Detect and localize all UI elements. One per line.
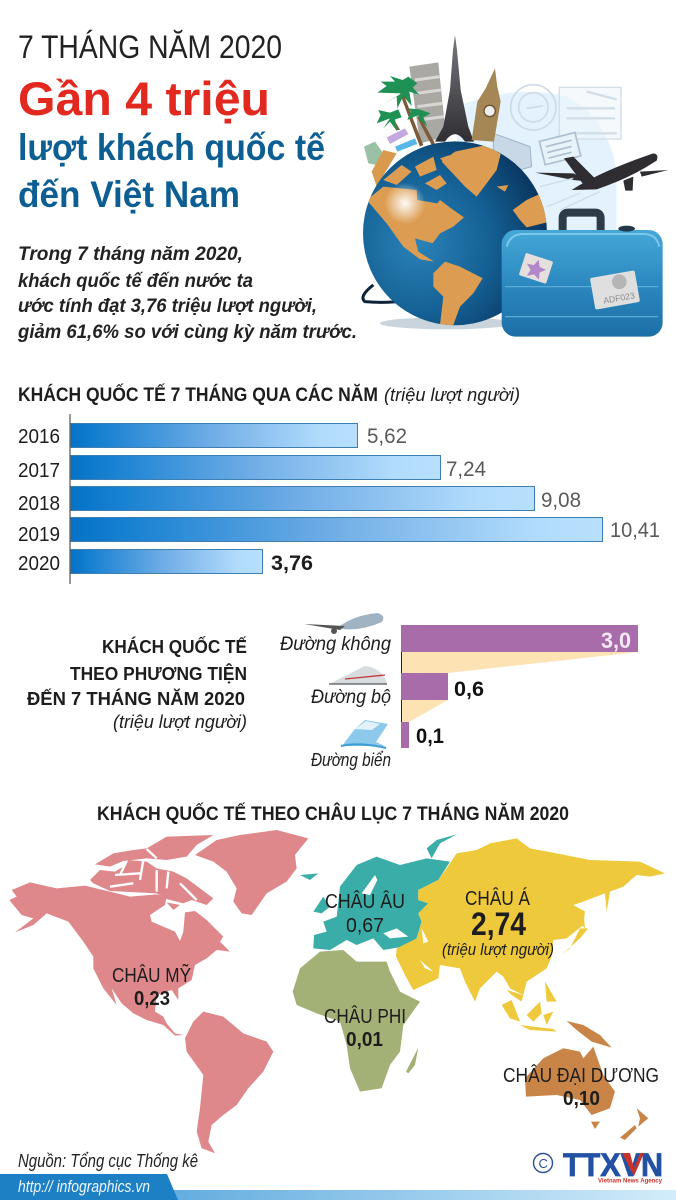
- title: subtitle line 1: lượt khách quốc tế: [18, 127, 325, 168]
- globe glare: [384, 183, 426, 224]
- label: Europe: 0,67: [346, 915, 384, 937]
- section heading: yearly arrivals: KHÁCH QUỐC TẾ 7 THÁNG QUA CÁC NĂM: [18, 384, 378, 406]
- archipelago channels: [110, 849, 197, 900]
- sticker: ADF023 tag: [590, 270, 640, 310]
- suitcase: [502, 213, 663, 337]
- label: Europe: CHÂU ÂU: [325, 890, 405, 913]
- suitcase body: [502, 230, 663, 337]
- sticker: star: [519, 253, 553, 284]
- globe: [363, 141, 550, 325]
- label: sea: Đường biển: [311, 750, 391, 770]
- bar: 2018: 2018: [18, 493, 60, 515]
- label: Oceania: [503, 1064, 659, 1110]
- plane trails: [540, 178, 600, 210]
- footer band: [0, 1174, 676, 1200]
- heading: arrivals by transport: KHÁCH QUỐC TẾ: [102, 636, 247, 657]
- label: Asia: 2,74: [471, 906, 526, 942]
- bar chart: arrivals by year: [18, 414, 660, 584]
- illustration: globe, landmarks, plane and suitcase: [363, 35, 668, 337]
- label: Europe: [325, 890, 405, 937]
- arctic islands: [383, 155, 450, 190]
- bar: 2018: [18, 486, 581, 515]
- intro paragraph: [17, 243, 357, 343]
- cream connectors: [401, 652, 638, 722]
- intro paragraph: Trong 7 tháng năm 2020,: [18, 243, 243, 265]
- bar: road: [401, 673, 484, 701]
- landmark: eiffel tower: [435, 35, 474, 142]
- arctic archipelago: [90, 860, 213, 905]
- bar: 2020: 3,76: [271, 552, 313, 575]
- intro paragraph: ước tính đạt 3,76 triệu lượt người,: [18, 295, 317, 317]
- continent: south america: [433, 262, 483, 325]
- label: Asia: CHÂU Á: [465, 887, 531, 910]
- intro paragraph: khách quốc tế đến nước ta: [18, 270, 253, 292]
- region: oceania: [525, 1021, 648, 1140]
- airplane: [535, 153, 668, 191]
- bar: 2017: 7,24: [446, 458, 486, 481]
- suitcase handle: [563, 213, 601, 230]
- region: europe: [300, 834, 457, 950]
- continent: europe: [512, 194, 546, 228]
- heading: arrivals by transport: THEO PHƯƠNG TIỆN: [70, 663, 247, 684]
- bar chart: arrivals by transport: [280, 613, 638, 770]
- ground shadow: [380, 317, 513, 329]
- icon: airplane: [304, 613, 383, 634]
- bar: 2019: [18, 518, 660, 546]
- label: Americas: [112, 963, 191, 1010]
- bar: 2017: [18, 456, 486, 482]
- bar: 2020: 2020: [18, 553, 60, 575]
- label: road: Đường bộ: [311, 687, 391, 708]
- title block: [18, 29, 325, 215]
- bar: 2019: 2019: [18, 524, 60, 546]
- stamp: small plane stamp: [539, 133, 581, 165]
- icon: ship: [341, 720, 388, 748]
- landmark: leaning tower: [409, 62, 446, 143]
- bar: 2019: 10,41: [610, 519, 660, 542]
- logo: TTXVN: C: [538, 1156, 548, 1171]
- continent: greenland: [442, 145, 501, 197]
- intro paragraph: giảm 61,6% so với cùng kỳ năm trước.: [17, 321, 357, 343]
- bar: 2018: 9,08: [541, 489, 581, 512]
- label: Americas: 0,23: [134, 988, 170, 1010]
- heading: arrivals by transport: (triệu lượt người): [113, 712, 247, 732]
- luggage tags: [387, 128, 408, 144]
- label: Americas: CHÂU MỸ: [112, 963, 191, 987]
- backdrop: pale blue shape: [457, 92, 617, 233]
- bar: 2016: 2016: [18, 426, 60, 448]
- heading: arrivals by transport: [27, 636, 247, 732]
- landmark: big ben: [472, 68, 501, 142]
- label: Africa: 0,01: [346, 1029, 383, 1051]
- region: asia: [396, 838, 665, 1032]
- suitcase clasp: [618, 226, 635, 232]
- icon: train: [329, 666, 387, 684]
- label: air: Đường không: [280, 634, 391, 655]
- logo: TTXVN: TTXVN: [563, 1147, 663, 1183]
- label: Africa: CHÂU PHI: [324, 1005, 406, 1028]
- label: Asia: [442, 887, 554, 959]
- section heading: yearly arrivals: (triệu lượt người): [384, 384, 520, 405]
- bar: road: 0,6: [454, 678, 484, 701]
- label: Africa: [324, 1005, 406, 1051]
- bar: air: 3,0: [601, 628, 631, 653]
- orange flap behind globe: [372, 150, 397, 187]
- bar: 2017: 2017: [18, 460, 60, 482]
- small pale palm: [364, 142, 383, 165]
- bar: sea: [401, 722, 444, 748]
- source note: Nguồn: Tổng cục Thống kê: [18, 1151, 198, 1171]
- bar: 2016: [18, 424, 407, 448]
- title: subtitle line 2: đến Việt Nam: [18, 174, 240, 215]
- heading: arrivals by continent: KHÁCH QUỐC TẾ THEO CHÂU LỤC 7 THÁNG NĂM 2020: [97, 803, 569, 825]
- stamp: rectangular postmark: [559, 87, 621, 139]
- orbit ring: [363, 277, 500, 302]
- continent: north america: [367, 187, 464, 262]
- bar: 2016: 5,62: [367, 425, 407, 448]
- footer url: http:// infographics.vn: [18, 1177, 150, 1196]
- region: americas: [9, 830, 308, 1153]
- sticker: ADF023 tag: ADF023: [602, 290, 636, 306]
- title: period: 7 THÁNG NĂM 2020: [18, 29, 282, 65]
- title: headline: Gần 4 triệu: [18, 72, 270, 125]
- stamp: round postmark: [511, 85, 556, 130]
- bar: air: [401, 625, 638, 653]
- stamp: colosseum: [493, 133, 532, 170]
- region: africa: [293, 950, 420, 1092]
- world map: [9, 830, 665, 1153]
- bar: sea: 0,1: [416, 725, 444, 748]
- palm trees: [377, 76, 435, 147]
- bar: 2020: [18, 550, 313, 575]
- label: Oceania: 0,10: [563, 1088, 600, 1110]
- heading: arrivals by transport: ĐẾN 7 THÁNG NĂM 2020: [27, 688, 245, 709]
- label: Asia: (triệu lượt người): [442, 941, 554, 959]
- logo: TTXVN: Vietnam News Agency: [598, 1178, 662, 1184]
